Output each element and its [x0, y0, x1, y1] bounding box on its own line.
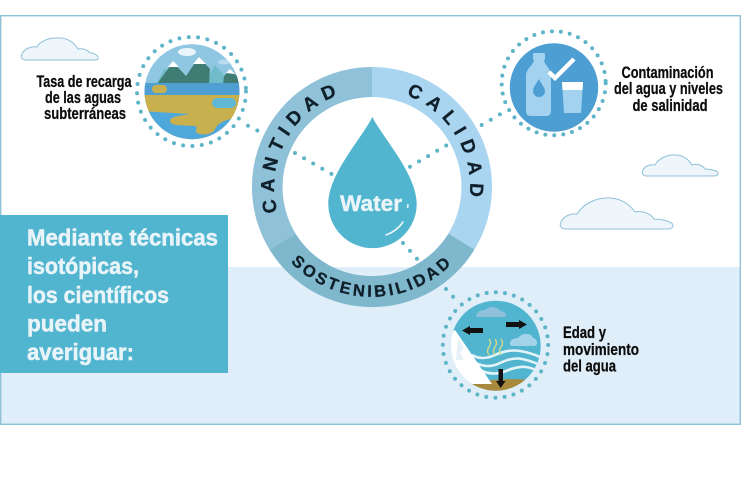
ring segment: calidad: [372, 67, 492, 250]
ring segment: cantidad: [252, 67, 372, 250]
label: age and movement: [563, 323, 639, 376]
cloud: right large: [560, 198, 673, 229]
ring label: cantidad: CANTIDAD: [260, 86, 335, 213]
icon: groundwater recharge: [137, 37, 246, 146]
callout heading: pueden: [27, 310, 107, 336]
callout heading: [27, 224, 218, 365]
label: groundwater recharge: [36, 72, 132, 123]
label: groundwater recharge: subterráneas: [44, 104, 126, 123]
callout heading: averiguar:: [27, 339, 134, 365]
icon: bottle, check and glass: [502, 31, 606, 135]
callout heading: isotópicas,: [27, 253, 139, 279]
ring segment: sostenibilidad: [270, 234, 474, 307]
callout panel: [0, 215, 228, 373]
cloud: right small: [642, 155, 718, 176]
cloud: top left: [21, 38, 98, 60]
drop label: Water: [340, 191, 402, 216]
callout heading: Mediante técnicas: [27, 224, 218, 250]
ring label: sostenibilidad: SOSTENIBILIDAD: [292, 256, 449, 298]
label: age and movement: del agua: [563, 356, 616, 376]
callout heading: los científicos: [27, 282, 169, 308]
ring label: calidad: CALIDAD: [408, 84, 484, 196]
label: contamination: Contaminación: [622, 63, 714, 82]
label: age and movement: movimiento: [563, 340, 639, 359]
dotted connector lines: [248, 112, 504, 300]
icon: water movement: [440, 292, 548, 398]
label: contamination: de salinidad: [632, 96, 708, 115]
label: groundwater recharge: Tasa de recarga: [36, 72, 132, 91]
central water drop: [328, 117, 417, 248]
ring: [252, 67, 492, 308]
label: groundwater recharge: de las aguas: [45, 88, 121, 107]
label: age and movement: Edad y: [563, 323, 606, 342]
label: contamination: [614, 63, 723, 115]
